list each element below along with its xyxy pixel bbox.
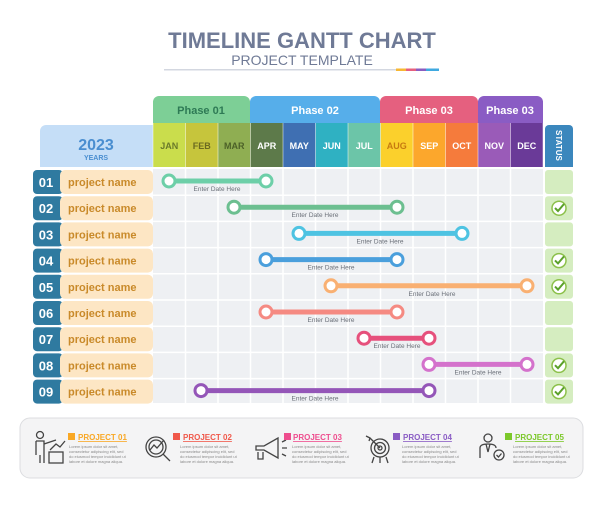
month header row: FEB [193, 141, 211, 151]
project rows labels: 01 [39, 175, 53, 190]
legend item 2: consectetur adipiscing elit, sed [180, 449, 234, 454]
legend item 4: PROJECT 04 [403, 433, 452, 442]
project rows labels: project name [68, 308, 136, 320]
month header row: MAY [290, 141, 309, 151]
legend panel [20, 418, 583, 478]
legend item 4: consectetur adipiscing elit, sed [402, 449, 456, 454]
legend item 1: PROJECT 01 [78, 433, 127, 442]
year box: 2023 [78, 137, 114, 154]
gantt bars: Enter Date Here [308, 317, 355, 324]
gantt bars: Enter Date Here [409, 291, 456, 298]
month header row: JAN [160, 141, 178, 151]
phase headers [153, 96, 543, 123]
month header row: MAR [224, 141, 245, 151]
title: TIMELINE GANTT CHART [168, 28, 436, 53]
status column [545, 170, 573, 404]
year box [40, 125, 153, 167]
legend item 1: do eiusmod tempor incididunt ut [69, 454, 127, 459]
legend item 5 [480, 433, 571, 464]
project rows labels: 03 [39, 227, 53, 242]
legend item 5: Lorem ipsum dolor sit amet, [513, 444, 562, 449]
legend item 3: PROJECT 03 [293, 433, 342, 442]
gantt bars: Enter Date Here [374, 343, 421, 350]
legend item 2: do eiusmod tempor incididunt ut [180, 454, 238, 459]
phase headers: Phase 02 [291, 105, 339, 117]
legend item 5: consectetur adipiscing elit, sed [513, 449, 567, 454]
gantt bars: Enter Date Here [194, 186, 241, 193]
legend item 1: Lorem ipsum dolor sit amet, [69, 444, 118, 449]
gantt bars [163, 175, 533, 403]
phase headers: Phase 01 [177, 105, 225, 117]
month header row: APR [257, 141, 277, 151]
title: PROJECT TEMPLATE [231, 52, 373, 68]
legend item 3: consectetur adipiscing elit, sed [292, 449, 346, 454]
project rows labels: project name [68, 177, 136, 189]
legend item 3: do eiusmod tempor incididunt ut [292, 454, 350, 459]
month header row: JUN [323, 141, 341, 151]
legend item 3 [256, 433, 350, 464]
grid background [153, 169, 543, 403]
legend item 4: Lorem ipsum dolor sit amet, [402, 444, 451, 449]
phase headers: Phase 03 [405, 105, 453, 117]
month header row [153, 123, 543, 167]
gantt bars: Enter Date Here [357, 238, 404, 245]
project rows labels: 02 [39, 201, 53, 216]
month header row: NOV [484, 141, 504, 151]
project rows labels: project name [68, 256, 136, 268]
legend item 5: PROJECT 05 [515, 433, 564, 442]
project rows labels: 04 [39, 254, 54, 269]
legend item 4 [366, 433, 460, 464]
legend item 5: do eiusmod tempor incididunt ut [513, 454, 571, 459]
year box: YEARS [84, 155, 108, 162]
legend item 4: labore et dolore magna aliqua. [402, 459, 456, 464]
project rows labels: project name [68, 203, 136, 215]
legend item 3: labore et dolore magna aliqua. [292, 459, 346, 464]
legend item 1 [36, 432, 127, 464]
month header row: OCT [452, 141, 472, 151]
month header row: DEC [517, 141, 537, 151]
legend item 3: Lorem ipsum dolor sit amet, [292, 444, 341, 449]
month header row: SEP [420, 141, 438, 151]
gantt bars: Enter Date Here [455, 369, 502, 376]
legend item 2: labore et dolore magna aliqua. [180, 459, 234, 464]
gantt bars: Enter Date Here [308, 265, 355, 272]
status header: STATUS [554, 130, 563, 161]
legend item 1: consectetur adipiscing elit, sed [69, 449, 123, 454]
project rows labels: 09 [39, 385, 53, 400]
gantt bars: Enter Date Here [292, 212, 339, 219]
project rows labels: 05 [39, 280, 53, 295]
title [164, 28, 439, 71]
project rows labels: project name [68, 387, 136, 399]
project rows labels: project name [68, 282, 136, 294]
project rows labels [33, 170, 153, 404]
legend item 1: labore et dolore magna aliqua. [69, 459, 123, 464]
month header row: AUG [387, 141, 407, 151]
project rows labels: project name [68, 334, 136, 346]
legend item 2: PROJECT 02 [183, 433, 232, 442]
legend item 2 [146, 433, 238, 464]
project rows labels: project name [68, 360, 136, 372]
legend item 4: do eiusmod tempor incididunt ut [402, 454, 460, 459]
legend item 5: labore et dolore magna aliqua. [513, 459, 567, 464]
phase headers: Phase 03 [486, 105, 534, 117]
legend item 2: Lorem ipsum dolor sit amet, [180, 444, 229, 449]
gantt bars: Enter Date Here [292, 396, 339, 403]
project rows labels: 08 [39, 358, 53, 373]
project rows labels: 06 [39, 306, 53, 321]
project rows labels: 07 [39, 332, 53, 347]
project rows labels: project name [68, 229, 136, 241]
status header [545, 125, 573, 167]
month header row: JUL [356, 141, 373, 151]
